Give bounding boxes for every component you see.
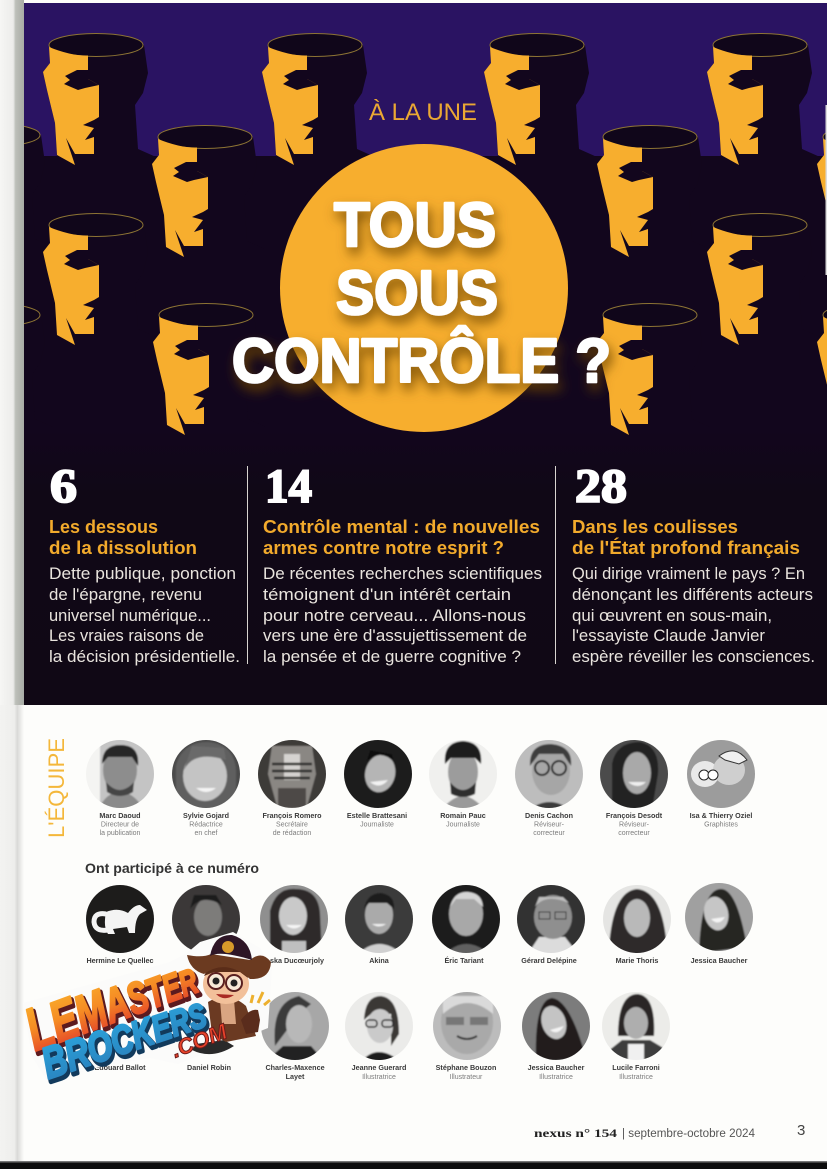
captions: Illustrateur (450, 1074, 483, 1081)
captions: ska Ducœurjoly (270, 956, 324, 965)
panel: cover banner (0, 3, 827, 705)
column: page 14: armes contre notre esprit ? (263, 537, 504, 558)
captions (94, 1063, 660, 1081)
captions (99, 811, 752, 837)
column: page 6: de l'épargne, revenu (49, 586, 202, 604)
captions (86, 956, 748, 965)
portrait: Marc Daoud (86, 740, 154, 808)
captions: Jessica Baucher (528, 1063, 585, 1072)
portrait: Lucile Farroni (602, 992, 670, 1060)
captions: Gérard Delépine (521, 956, 577, 965)
portrait: Hermine Le Quellec (86, 885, 154, 953)
footer: issue line: nexus n° 154 (534, 1128, 617, 1140)
captions: François Desodt (606, 811, 663, 820)
portrait: Sylvie Gojard (172, 740, 240, 808)
captions: de rédaction (273, 830, 311, 837)
sticker: Lemaster Brockers logo (17, 932, 272, 1092)
captions: Journaliste (446, 822, 480, 828)
column: page 14: De récentes recherches scientifiques (263, 565, 542, 583)
team row (84, 738, 757, 837)
captions: Réviseur- (534, 822, 565, 828)
wordmark: BROCKERS (36, 989, 212, 1089)
portrait: Ska Ducœurjoly (260, 885, 328, 953)
captions: Directeur de (101, 822, 139, 828)
portrait: François Desodt (600, 740, 668, 808)
captions: correcteur (533, 830, 565, 837)
captions: correcteur (618, 830, 650, 837)
portrait: Stéphane Bouzon (433, 992, 501, 1060)
portrait: Jessica Baucher (522, 992, 590, 1060)
captions: en chef (195, 830, 218, 837)
column: page 14: la pensée et de guerre cognitive ? (263, 648, 521, 666)
column: page 14: témoignent d'un intérêt certain (263, 586, 511, 604)
sticker backing (23, 932, 272, 1082)
column: page 6: la décision présidentielle. (49, 648, 240, 666)
orange circle (280, 144, 568, 432)
portrait: second contributor (172, 885, 240, 950)
title: SOUS (336, 259, 498, 328)
title: TOUS (334, 191, 496, 260)
column: page 28: dénonçant les différents acteurs (572, 586, 813, 604)
portrait: Jessica Baucher (685, 883, 753, 951)
portrait: Marie Thoris (603, 885, 671, 953)
heading: contributors: Ont participé à ce numéro (85, 860, 259, 876)
column: page 6: Les dessous (49, 516, 158, 537)
captions: Illustratrice (362, 1074, 396, 1081)
captions: François Romero (262, 811, 322, 820)
captions: la publication (100, 830, 141, 837)
portrait: Akina (345, 885, 413, 953)
captions: Édouard Ballot (94, 1063, 146, 1072)
wordmark: BROCKERS (38, 992, 214, 1092)
character (187, 935, 271, 1042)
cut-off portrait behind sticker (192, 1040, 234, 1054)
section label: l'équipe: L'ÉQUIPE (44, 738, 69, 838)
captions: Marc Daoud (99, 811, 141, 820)
captions: Hermine Le Quellec (86, 956, 154, 965)
column: page 14: Contrôle mental : de nouvelles (263, 516, 540, 537)
captions: Romain Pauc (440, 811, 486, 820)
captions: Illustratrice (539, 1074, 573, 1081)
column: page 14: vers une ère d'assujettissement de (263, 627, 527, 645)
wordmark: LEMASTER (19, 943, 207, 1066)
column: page 6: Dette publique, ponction (49, 565, 236, 583)
captions: Sylvie Gojard (183, 811, 229, 820)
portrait: Denis Cachon (515, 740, 583, 808)
captions: Charles-Maxence (265, 1063, 325, 1072)
column: page 28: 28 (575, 460, 627, 513)
captions: Stéphane Bouzon (436, 1063, 496, 1072)
column: page 28: espère réveiller les consciences. (572, 648, 815, 666)
wordmark: LEMASTER (17, 940, 205, 1063)
portrait: Romain Pauc (429, 740, 497, 808)
column: page 14 (263, 460, 542, 666)
title (232, 191, 611, 396)
portrait: Jeanne Guerard (345, 992, 413, 1060)
column: page 6 (49, 460, 240, 666)
captions: Lucile Farroni (612, 1063, 660, 1072)
captions: Réviseur- (619, 822, 650, 828)
captions: Éric Tariant (444, 956, 484, 965)
page number: 3 (797, 1122, 805, 1139)
captions: Layet (286, 1072, 305, 1081)
wordmark (17, 940, 231, 1092)
captions: Denis Cachon (525, 811, 573, 820)
captions: Jessica Baucher (691, 956, 748, 965)
column: page 14: 14 (265, 460, 312, 513)
portrait: Charles-Maxence Layet (261, 992, 329, 1060)
captions: Graphistes (704, 822, 738, 828)
column: page 28 (572, 460, 815, 666)
captions: Akina (369, 956, 390, 965)
captions: Isa & Thierry Oziel (690, 811, 752, 820)
portrait: Éric Tariant (432, 885, 500, 953)
column: page 28: l'essayiste Claude Janvier (572, 627, 766, 645)
captions: Marie Thoris (616, 956, 658, 965)
contributors row 1 (84, 881, 755, 965)
captions: Daniel Robin (187, 1063, 231, 1072)
column: page 28: qui œuvrent en sous-main, (572, 607, 772, 625)
illustration: hollow heads (0, 34, 827, 435)
footer: issue line (534, 1128, 756, 1140)
column: page 6: de la dissolution (49, 537, 197, 558)
column: page 14: pour notre cerveau... Allons-nous (263, 607, 526, 625)
portrait: Estelle Brattesani (344, 740, 412, 808)
captions: Secrétaire (276, 822, 308, 828)
wordmark: .COM (168, 1019, 231, 1063)
column: page 28: Qui dirige vraiment le pays ? En (572, 565, 805, 583)
column: page 6: Les vraies raisons de (49, 627, 204, 645)
column: page 6: universel numérique... (49, 607, 211, 625)
portrait: Isa and Thierry Oziel (687, 740, 755, 808)
kicker: À LA UNE (369, 99, 477, 126)
column: page 28: de l'État profond français (572, 537, 800, 558)
bottom edge (0, 1161, 827, 1169)
footer: issue line: | septembre-octobre 2024 (622, 1128, 756, 1140)
portrait: Gérard Delépine (517, 885, 585, 953)
captions: Jeanne Guerard (352, 1063, 406, 1072)
portrait: François Romero (258, 740, 326, 808)
captions: Illustratrice (619, 1074, 653, 1081)
captions: Estelle Brattesani (347, 811, 407, 820)
captions: Journaliste (360, 822, 394, 828)
captions: Rédactrice (189, 822, 223, 828)
title: CONTRÔLE ? (232, 327, 611, 396)
column: page 28: Dans les coulisses (572, 516, 738, 537)
column: page 6: 6 (50, 460, 77, 513)
contributors row 2 (94, 990, 672, 1081)
